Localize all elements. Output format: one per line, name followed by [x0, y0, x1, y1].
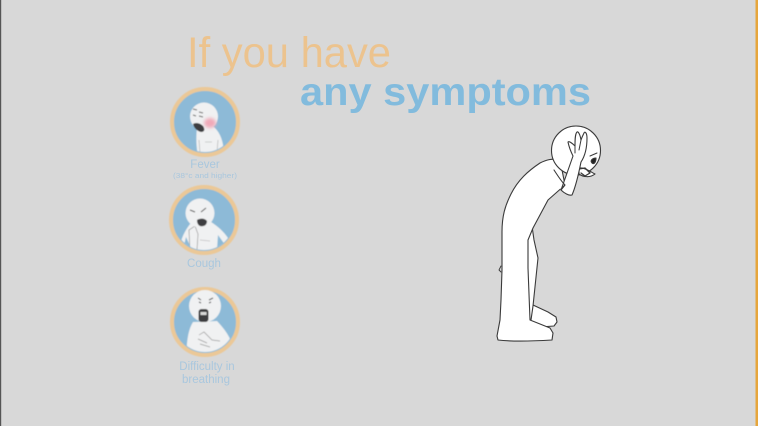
label: 38°c and higher: (38°c and higher) — [173, 171, 238, 180]
right edge bar — [756, 0, 758, 426]
label: Difficulty in breathing — [179, 361, 235, 386]
label: Difficulty in breathing: breathing — [182, 374, 230, 386]
body and front leg — [497, 159, 565, 341]
icon: difficulty in breathing — [172, 289, 238, 356]
hip detail — [499, 266, 501, 272]
label: Cough: Cough — [187, 258, 221, 270]
label: Fever: Fever — [190, 159, 220, 171]
back leg — [526, 226, 538, 320]
head — [552, 126, 600, 175]
back foot — [528, 305, 557, 327]
illustration: person bent over holding head — [497, 126, 600, 341]
title: any symptoms: any symptoms — [300, 71, 591, 114]
icon: cough — [171, 187, 237, 256]
title: If you have: If you have — [187, 29, 391, 77]
arm and hand — [554, 132, 587, 195]
label: Difficulty in breathing: Difficulty in — [179, 361, 235, 373]
face: eye and beard — [591, 158, 596, 164]
icon: fever — [172, 89, 238, 156]
